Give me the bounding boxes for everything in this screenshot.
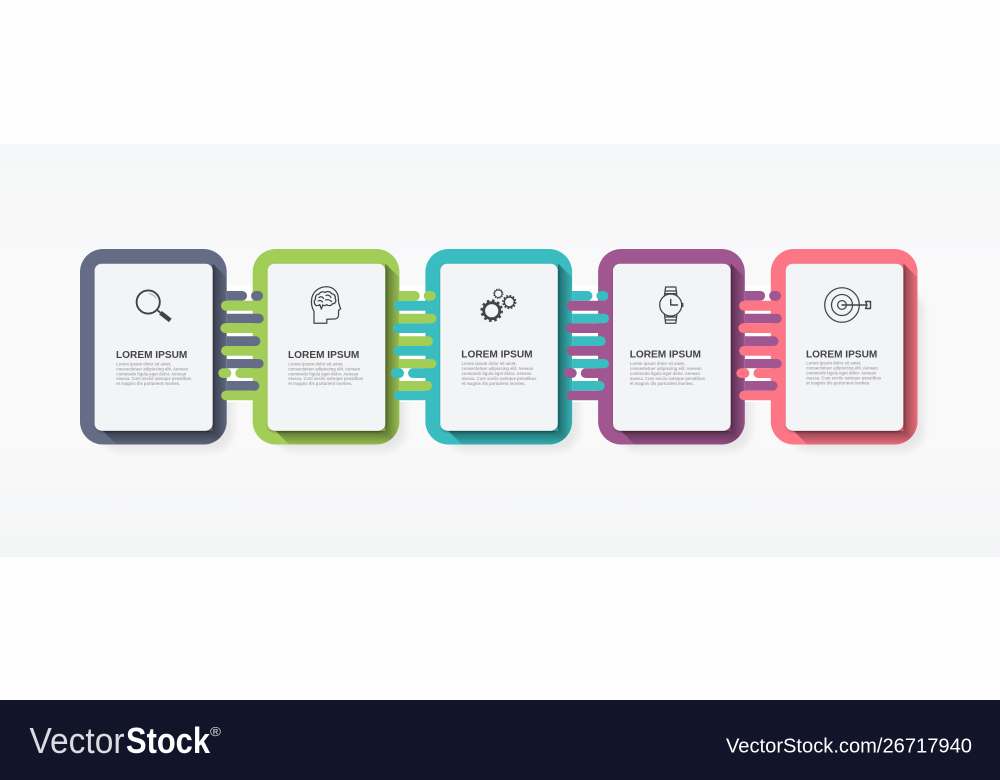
- panel frame: pink: [771, 249, 918, 445]
- connector gap backgrounds: [226, 285, 772, 402]
- body text: massa. Cum sociis natoque penatibus: [288, 376, 364, 382]
- body text: commodo ligula eget dolor. Aenean: [806, 371, 876, 377]
- body text: et magnis dis parturient montes.: [116, 381, 181, 387]
- body text: consectetuer adipiscing elit. Aenean: [630, 366, 702, 372]
- body text: et magnis dis parturient montes.: [630, 381, 694, 387]
- heading: LOREM IPSUM: [630, 350, 701, 361]
- card 5: [786, 264, 903, 431]
- panel frame: green: [253, 249, 399, 445]
- body text: [116, 361, 192, 387]
- body text: massa. Cum sociis natoque penatibus: [806, 376, 881, 382]
- connector: teal to purple: [564, 291, 609, 400]
- icon: magnifying glass: [137, 290, 170, 320]
- body text: massa. Cum sociis natoque penatibus: [116, 376, 192, 382]
- body text: massa. Cum sociis natoque penatibus: [630, 376, 705, 382]
- connector: purple to pink: [736, 291, 782, 400]
- card 2: [268, 264, 385, 431]
- heading: LOREM IPSUM: [116, 350, 187, 361]
- body text: consectetuer adipiscing elit. Aenean: [288, 366, 360, 372]
- connector: slate to green: [218, 291, 264, 400]
- body text: consectetuer adipiscing elit. Aenean: [462, 366, 533, 372]
- footer url: VectorStock.com/26717940: [726, 736, 972, 758]
- card 1: [95, 264, 213, 431]
- body text: commodo ligula eget dolor. Aenean: [462, 371, 532, 377]
- body text: Lorem ipsum dolor sit amet,: [462, 361, 517, 367]
- footer logo: Vector: [30, 720, 125, 761]
- body text: Lorem ipsum dolor sit amet,: [116, 361, 172, 367]
- heading: LOREM IPSUM: [288, 350, 359, 361]
- body text: massa. Cum sociis natoque penatibus: [462, 376, 537, 382]
- footer logo: Stock: [126, 720, 211, 761]
- heading: LOREM IPSUM: [806, 349, 877, 360]
- panel frame: purple: [598, 249, 745, 445]
- body text: [462, 361, 537, 387]
- body text: commodo ligula eget dolor. Aenean: [630, 371, 700, 377]
- body text: commodo ligula eget dolor. Aenean: [288, 371, 358, 377]
- footer logo: [30, 720, 221, 761]
- body text: consectetuer adipiscing elit. Aenean: [806, 366, 878, 372]
- body text: consectetuer adipiscing elit. Aenean: [116, 366, 188, 372]
- background band: [0, 144, 1000, 557]
- body text: [630, 361, 705, 387]
- body text: [288, 361, 364, 387]
- body text: [806, 361, 881, 387]
- panel frame: slate: [80, 249, 227, 445]
- body text: Lorem ipsum dolor sit amet,: [288, 361, 344, 367]
- footer logo: ®: [210, 724, 221, 739]
- footer bar: [0, 700, 1000, 780]
- body text: et magnis dis parturient montes.: [806, 381, 871, 387]
- heading: LOREM IPSUM: [461, 350, 533, 361]
- body text: Lorem ipsum dolor sit amet,: [630, 361, 685, 367]
- body text: commodo ligula eget dolor. Aenean: [116, 371, 186, 377]
- body text: et magnis dis parturient montes.: [462, 381, 526, 387]
- connector: green to teal: [391, 291, 436, 400]
- icon: gears: [482, 289, 516, 321]
- body text: Lorem ipsum dolor sit amet,: [806, 361, 862, 367]
- card 4: [613, 264, 731, 431]
- icon: wristwatch: [660, 287, 683, 323]
- frame ambient shadows: [100, 290, 924, 451]
- card 3: [440, 264, 558, 431]
- body text: et magnis dis parturient montes.: [288, 381, 353, 387]
- icon: target with arrow: [825, 288, 870, 322]
- icon: head with brain: [311, 287, 341, 323]
- panel frame: teal: [425, 249, 572, 445]
